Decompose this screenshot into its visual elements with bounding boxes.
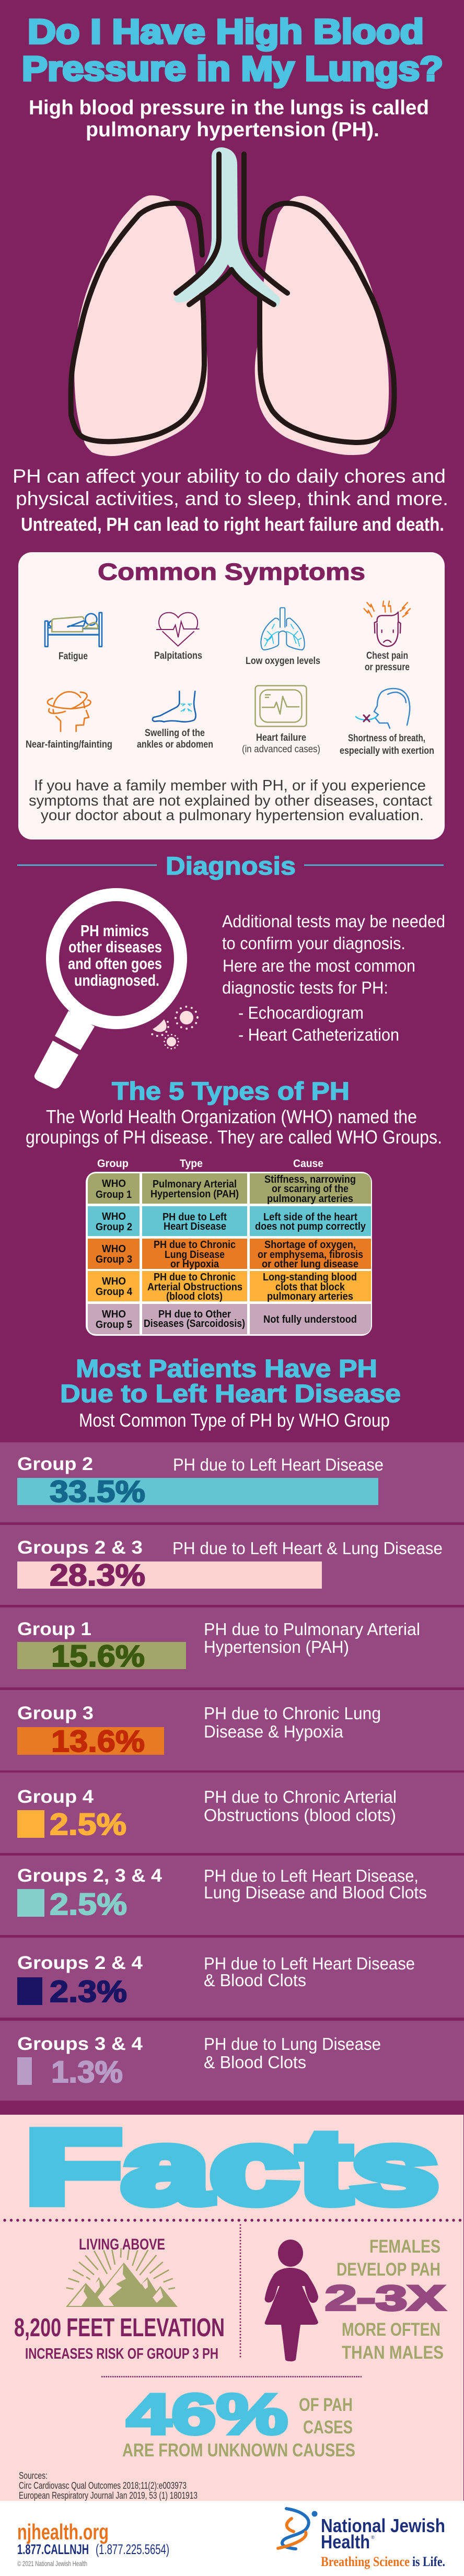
fact: 46 percent: [122, 2382, 355, 2461]
icon: chest pain head: [364, 601, 410, 646]
text: WHO groupings intro: The World Health Organization (WHO) named the: [46, 1106, 417, 1127]
fact: elevation: [14, 2236, 225, 2362]
row: group 2: 33.5%: [50, 1475, 145, 1509]
callout: PH mimics: undiagnosed.: [74, 971, 159, 989]
heading: most patients: [60, 1355, 401, 1408]
fact: 46 percent: 46%: [126, 2382, 288, 2446]
sources: European Respiratory Journal Jan 2019, 53 (1) 1801913: [19, 2490, 198, 2501]
callout: PH mimics: and often goes: [68, 954, 162, 973]
icon: virus particles: [150, 1007, 198, 1049]
row: group 1: Hypertension (PAH): [150, 1188, 239, 1200]
icon: swollen foot: [153, 691, 196, 722]
row: group 1: Hypertension (PAH): [204, 1637, 349, 1657]
row: groups 3 and 4: 1.3%: [51, 2055, 123, 2089]
logo mark: [278, 2509, 318, 2549]
row: group 2: does not pump correctly: [255, 1221, 366, 1232]
fact: females: MORE OFTEN: [342, 2319, 440, 2340]
row: groups 3 and 4: Groups 3 & 4: [17, 2034, 143, 2054]
text: WHO groupings intro: [26, 1106, 442, 1148]
logo: National Jewish Health: Health: [321, 2531, 370, 2552]
paragraph: PH effects: PH can affect your ability to do daily chores and: [13, 465, 446, 487]
text: additional tests: Here are the most common: [223, 956, 415, 975]
contact details: 1.877.CALLNJH: [17, 2542, 89, 2557]
row: group 4: [0, 1773, 464, 1853]
chart: PH by WHO group: [0, 1442, 464, 2101]
label: swelling: Swelling of the: [145, 728, 205, 739]
fact: 46 percent: OF PAH: [299, 2395, 353, 2415]
row: group 3: WHO: [102, 1243, 126, 1255]
row: group 4: [88, 1271, 371, 1302]
contact details: [17, 2520, 169, 2568]
title: Do I Have High Blood: [28, 12, 424, 51]
row: group 3: PH due to Chronic Lung: [204, 1704, 381, 1723]
row: groups 2 and 4: [0, 1938, 464, 2018]
label: chest pain: [365, 650, 410, 673]
title: [22, 12, 443, 88]
sources: [19, 2470, 198, 2501]
text: family member advice: your doctor about a pulmonary hypertension evaluation.: [41, 807, 424, 824]
callout: PH mimics: [68, 922, 162, 989]
row: group 1: or scarring of the: [272, 1183, 349, 1195]
label: heart failure: [242, 732, 320, 755]
heading: facts: Facts: [25, 2109, 439, 2225]
panel: facts: [0, 2109, 464, 2501]
row: group 2: [88, 1206, 371, 1236]
row: group 4: Group 4: [96, 1286, 133, 1298]
label: shortness of breath: especially with exertion: [340, 745, 434, 756]
row: group 3: [0, 1690, 464, 1770]
row: group 1: pulmonary arteries: [267, 1193, 353, 1205]
row: group 3: Group 3: [17, 1703, 94, 1723]
row: group 3: Disease & Hypoxia: [204, 1722, 344, 1741]
subtitle: pulmonary hypertension (PH).: [86, 119, 379, 141]
row: groups 2, 3 and 4: PH due to Left Heart Disease,: [204, 1866, 419, 1885]
fact: 46 percent: CASES: [303, 2417, 353, 2438]
row: group 2: Group 2: [17, 1454, 93, 1474]
row: group 3: Group 3: [96, 1254, 132, 1265]
row: group 4: Group 4: [17, 1787, 94, 1807]
text: family member advice: symptoms that are not explained by other diseases, contact: [29, 792, 432, 809]
callout: PH mimics: other diseases: [68, 938, 162, 956]
table: WHO groups: [86, 1158, 372, 1336]
row: groups 3 and 4: PH due to Lung Disease: [204, 2034, 381, 2054]
row: group 5: Group 5: [96, 1319, 132, 1331]
left lung fill: [74, 195, 207, 456]
row: groups 2 and 3: Groups 2 & 3: [17, 1537, 143, 1558]
logo: National Jewish Health: ®: [371, 2535, 375, 2540]
logo: National Jewish Health: is Life.: [412, 2554, 445, 2569]
row: groups 2 and 4: 2.3%: [50, 1975, 127, 2009]
label: palpitations: Palpitations: [154, 650, 202, 661]
row: groups 2 and 4: Groups 2 & 4: [17, 1953, 143, 1973]
row: group 3: 13.6%: [51, 1724, 145, 1758]
row: groups 2 and 3: PH due to Left Heart & Lung Disease: [172, 1538, 443, 1558]
row: group 3: or emphysema, fibrosis: [258, 1249, 363, 1261]
row: group 2: Left side of the heart: [263, 1211, 357, 1223]
row: groups 3 and 4: & Blood Clots: [204, 2053, 306, 2072]
row: group 1: Stiffness, narrowing: [264, 1174, 356, 1185]
paragraph: PH effects: physical activities, and to sleep, think and more.: [16, 488, 448, 509]
row: groups 2 and 4: & Blood Clots: [204, 1971, 306, 1990]
table header: Cause: [293, 1158, 323, 1170]
airway lines: [176, 154, 287, 305]
row: group 4: 2.5%: [50, 1808, 126, 1841]
label: heart failure: Heart failure: [256, 732, 306, 743]
row: groups 2, 3 and 4: Groups 2, 3 & 4: [17, 1866, 163, 1886]
heading: common symptoms: Common Symptoms: [98, 558, 365, 585]
row: group 5: Not fully understood: [263, 1314, 357, 1325]
label: low oxygen levels: Low oxygen levels: [246, 656, 320, 667]
logo: National Jewish Health: Breathing Science: [321, 2554, 410, 2569]
text: additional tests: - Heart Catheterization: [238, 1025, 399, 1044]
panel: common symptoms: [18, 552, 445, 840]
sources: Sources:: [19, 2470, 48, 2481]
icon: fatigue bed: [45, 613, 102, 647]
subtitle: High blood pressure in the lungs is called: [29, 97, 429, 119]
heading: most patients: Most Patients Have PH: [76, 1355, 377, 1383]
row: group 4: Arterial Obstructions: [147, 1281, 242, 1293]
table header: Type: [180, 1158, 203, 1170]
contact details: (1.877.225.5654): [96, 2542, 169, 2557]
row: group 3: PH due to Chronic: [154, 1239, 236, 1251]
row: group 2: Heart Disease: [164, 1221, 226, 1232]
icon: shortness of breath: [356, 689, 410, 728]
row: group 5: [88, 1304, 371, 1334]
trachea: [174, 147, 280, 307]
row: group 1: PH due to Pulmonary Arterial: [204, 1619, 420, 1639]
row: group 4: clots that block: [275, 1281, 345, 1293]
row: group 3: or other lung disease: [262, 1258, 358, 1270]
left lung outline: [71, 203, 204, 441]
row: group 3: Lung Disease: [165, 1249, 225, 1261]
footer: [0, 2501, 464, 2576]
callout: PH mimics: PH mimics: [80, 922, 149, 940]
row: groups 3 and 4: [0, 2021, 464, 2101]
row: group 1: WHO: [102, 1178, 126, 1190]
label: shortness of breath: [340, 733, 434, 756]
heading: most patients: Due to Left Heart Disease: [60, 1380, 401, 1408]
fact: females: 2-3X: [325, 2278, 445, 2318]
text: additional tests: Additional tests may be needed: [222, 912, 445, 931]
subheading: most common type: Most Common Type of PH by WHO Group: [79, 1409, 390, 1431]
row: groups 2, 3 and 4: 2.5%: [50, 1887, 127, 1921]
row: group 4: PH due to Chronic: [154, 1272, 236, 1283]
row: group 1: [0, 1607, 464, 1687]
label: swelling: [137, 728, 213, 750]
row: group 4: Long-standing blood: [263, 1272, 357, 1283]
label: near-fainting: Near-fainting/fainting: [26, 739, 112, 750]
fact: females: THAN MALES: [342, 2342, 444, 2363]
icon: low oxygen lungs: [261, 608, 305, 650]
row: group 1: 15.6%: [51, 1639, 145, 1673]
right lung outline: [260, 203, 394, 442]
row: group 2: PH due to Left: [163, 1211, 227, 1223]
fact: elevation: INCREASES RISK OF GROUP 3 PH: [25, 2346, 218, 2362]
contact details: © 2021 National Jewish Health: [17, 2559, 87, 2568]
row: group 5: WHO: [102, 1309, 126, 1320]
table header: Group: [97, 1158, 129, 1170]
table header: [97, 1158, 323, 1170]
row: group 4: Obstructions (blood clots): [204, 1805, 396, 1825]
text: additional tests: diagnostic tests for PH:: [222, 978, 388, 997]
label: heart failure: (in advanced cases): [242, 744, 320, 755]
row: group 3: Shortage of oxygen,: [264, 1239, 356, 1251]
sources: Circ Cardiovasc Qual Outcomes 2018;11(2):e003973: [19, 2480, 187, 2491]
row: group 1: Group 1: [96, 1189, 132, 1200]
paragraph: PH effects: [13, 465, 448, 535]
row: group 2: WHO: [102, 1211, 126, 1222]
row: group 5: PH due to Other: [158, 1309, 231, 1320]
row: groups 2 and 4: PH due to Left Heart Disease: [204, 1954, 415, 1973]
text: additional tests: to confirm your diagnosis.: [222, 934, 405, 953]
fact: 46 percent: ARE FROM UNKNOWN CAUSES: [122, 2440, 355, 2461]
fact: females: FEMALES: [369, 2236, 440, 2257]
row: group 1: Pulmonary Arterial: [153, 1179, 237, 1190]
text: family member advice: If you have a family member with PH, or if you experience: [34, 777, 426, 794]
row: group 2: PH due to Left Heart Disease: [173, 1455, 384, 1474]
row: group 3: or Hypoxia: [170, 1258, 219, 1270]
label: chest pain: Chest pain: [366, 650, 408, 661]
title: Pressure in My Lungs?: [22, 49, 443, 88]
fact: elevation: LIVING ABOVE: [79, 2236, 165, 2253]
heading: diagnosis: Diagnosis: [166, 853, 296, 880]
row: groups 2 and 3: [0, 1525, 464, 1605]
fact: females: [265, 2236, 445, 2363]
row: group 1: [88, 1173, 371, 1205]
label: shortness of breath: Shortness of breath,: [348, 733, 425, 744]
logo: National Jewish Health: [278, 2509, 445, 2569]
heading: the 5 types: The 5 Types of PH: [112, 1078, 350, 1105]
contact details: njhealth.org: [17, 2520, 109, 2544]
fact: elevation: 8,200 FEET ELEVATION: [14, 2314, 225, 2342]
text: additional tests: - Echocardiogram: [238, 1003, 364, 1022]
row: groups 2, 3 and 4: [0, 1856, 464, 1935]
row: group 2: Group 2: [96, 1221, 132, 1233]
row: group 4: (blood clots): [166, 1291, 223, 1302]
subtitle: [29, 97, 429, 141]
text: additional tests: [222, 912, 445, 1044]
right lung fill: [255, 196, 389, 455]
label: fatigue: Fatigue: [59, 651, 88, 662]
logo: National Jewish Health: National Jewish: [321, 2515, 445, 2536]
icon: heart monitor: [255, 685, 306, 726]
row: group 4: pulmonary arteries: [267, 1291, 353, 1302]
row: group 4: WHO: [102, 1276, 126, 1287]
icon: magnifying glass: [34, 894, 180, 1089]
text: family member advice: [29, 777, 432, 824]
row: group 1: Group 1: [17, 1619, 91, 1639]
row: group 4: PH due to Chronic Arterial: [204, 1787, 397, 1806]
row: group 2: [0, 1442, 464, 1522]
icon: woman: [265, 2240, 318, 2361]
row: groups 2, 3 and 4: Lung Disease and Blood Clots: [204, 1883, 427, 1902]
row: groups 2 and 3: 28.3%: [50, 1558, 145, 1592]
row: group 3: [88, 1239, 371, 1270]
icon: fainting head: [48, 692, 91, 731]
icon: mountains: [66, 2248, 178, 2307]
lungs illustration: [71, 147, 395, 456]
row: group 5: Diseases (Sarcoidosis): [144, 1318, 245, 1330]
fact: females: DEVELOP PAH: [337, 2259, 440, 2280]
icon: palpitations heart: [156, 613, 200, 646]
label: swelling: ankles or abdomen: [137, 739, 213, 750]
label: chest pain: or pressure: [365, 662, 410, 673]
